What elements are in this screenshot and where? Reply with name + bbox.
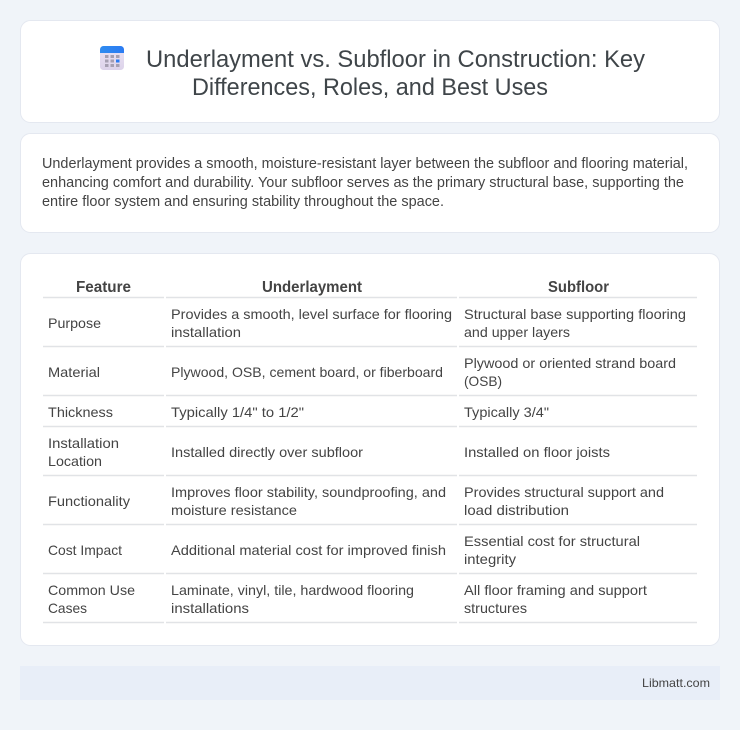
title: Differences, Roles, and Best Uses xyxy=(192,74,548,101)
row: purpose: Purpose xyxy=(48,315,101,331)
row: material: Plywood, OSB, cement board, or fiberboard xyxy=(171,364,443,380)
row: installation location xyxy=(43,435,697,476)
row: common use cases: structures xyxy=(464,600,527,616)
text block: introduction: entire floor system and ensuring stability throughout the space. xyxy=(42,194,444,210)
text block: introduction: Underlayment provides a smooth, moisture-resistant layer between the subfloor and flooring material, xyxy=(42,156,688,172)
row: material: Material xyxy=(48,364,100,380)
row: installation location: Location xyxy=(48,453,102,469)
panel: comparison table xyxy=(20,254,720,646)
table header: Feature xyxy=(76,279,131,296)
table header xyxy=(43,279,697,298)
row: installation location: Installed directly over subfloor xyxy=(171,444,363,460)
row: installation location: Installation xyxy=(48,435,119,451)
row: common use cases xyxy=(43,582,697,622)
row: functionality: Functionality xyxy=(48,493,130,509)
row: thickness: Thickness xyxy=(48,404,113,420)
row: installation location: Installed on floor joists xyxy=(464,444,610,460)
row: purpose: and upper layers xyxy=(464,324,570,340)
footer bar xyxy=(20,666,720,700)
row: cost impact: integrity xyxy=(464,551,516,567)
row: purpose: Structural base supporting flooring xyxy=(464,306,686,322)
row: common use cases: All floor framing and support xyxy=(464,582,647,598)
row: thickness: Typically 3/4" xyxy=(464,404,549,420)
row: material xyxy=(43,355,697,396)
row: common use cases: Laminate, vinyl, tile, hardwood flooring xyxy=(171,582,414,598)
row: material: (OSB) xyxy=(464,373,502,389)
text block: introduction: enhancing comfort and durability. Your subfloor serves as the primary structural base, supporting the xyxy=(42,175,684,191)
row: cost impact xyxy=(43,533,697,574)
title xyxy=(146,46,645,101)
row: functionality: Provides structural support and xyxy=(464,484,664,500)
panel: introduction xyxy=(20,134,720,232)
table header: Subfloor xyxy=(548,279,609,296)
row: functionality: Improves floor stability, soundproofing, and xyxy=(171,484,446,500)
row: purpose: installation xyxy=(171,324,241,340)
text block: introduction xyxy=(42,156,688,210)
row: purpose xyxy=(43,306,697,346)
row: common use cases: installations xyxy=(171,600,249,616)
row: functionality xyxy=(43,484,697,524)
row: cost impact: Essential cost for structural xyxy=(464,533,640,549)
row: functionality: load distribution xyxy=(464,502,569,518)
row: thickness xyxy=(43,404,697,426)
panel: title header xyxy=(20,20,720,122)
row: purpose: Provides a smooth, level surface for flooring xyxy=(171,306,452,322)
row: material: Plywood or oriented strand board xyxy=(464,355,676,371)
title: Underlayment vs. Subfloor in Construction: Key xyxy=(146,46,645,73)
row: functionality: moisture resistance xyxy=(171,502,297,518)
row: cost impact: Cost Impact xyxy=(48,542,122,558)
footer credit: Libmatt.com xyxy=(642,676,710,690)
table header: Underlayment xyxy=(262,279,362,296)
row: thickness: Typically 1/4" to 1/2" xyxy=(171,404,304,420)
row: common use cases: Common Use xyxy=(48,582,135,598)
icon: calendar xyxy=(100,46,124,70)
row: common use cases: Cases xyxy=(48,600,87,616)
row: cost impact: Additional material cost for improved finish xyxy=(171,542,446,558)
